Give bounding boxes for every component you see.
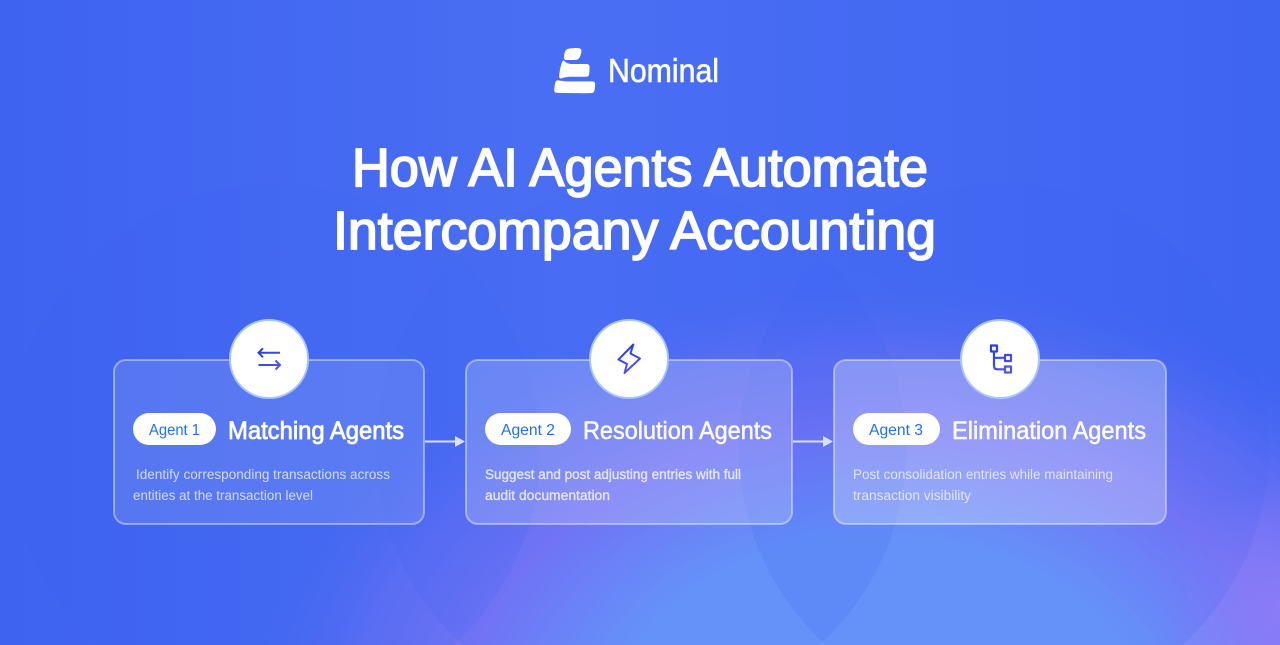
title: How AI Agents Automate: [352, 138, 928, 198]
description: [133, 467, 390, 503]
title: [333, 138, 936, 261]
card: [114, 360, 424, 524]
panel: Elimination Agents: [834, 320, 1166, 524]
badge: Agent 1: Agent 1: [149, 422, 200, 439]
icon: swap arrows: [230, 320, 308, 398]
description: audit documentation: [485, 488, 610, 503]
description: transaction visibility: [853, 488, 971, 503]
arrow: agent 1 to agent 2: [425, 436, 465, 447]
description: Identify corresponding transactions across: [136, 467, 390, 482]
description: [853, 467, 1113, 503]
badge: Agent 3: Agent 3: [869, 422, 923, 439]
wordmark: Nominal: [608, 52, 719, 89]
description: [485, 467, 741, 503]
description: Post consolidation entries while maintaining: [853, 467, 1113, 482]
badge: Agent 2: [485, 413, 571, 445]
card: [834, 360, 1166, 524]
arrow: agent 2 to agent 3: [793, 436, 833, 447]
heading: Resolution Agents: [583, 417, 772, 445]
icon: lightning bolt: [590, 320, 668, 398]
badge: Agent 1: [133, 413, 216, 445]
icon: hierarchy tree: [961, 320, 1039, 398]
icon: stacked logo mark: [555, 49, 594, 92]
logo: Nominal: [555, 49, 719, 92]
panel: Resolution Agents: [466, 320, 792, 524]
badge: Agent 3: [853, 413, 940, 445]
title: Intercompany Accounting: [333, 201, 936, 261]
description: entities at the transaction level: [133, 488, 313, 503]
badge: Agent 2: Agent 2: [501, 422, 555, 439]
heading: Matching Agents: [228, 417, 404, 445]
description: Suggest and post adjusting entries with full: [485, 467, 741, 482]
card: [466, 360, 792, 524]
panel: Matching Agents: [114, 320, 424, 524]
heading: Elimination Agents: [952, 417, 1146, 445]
